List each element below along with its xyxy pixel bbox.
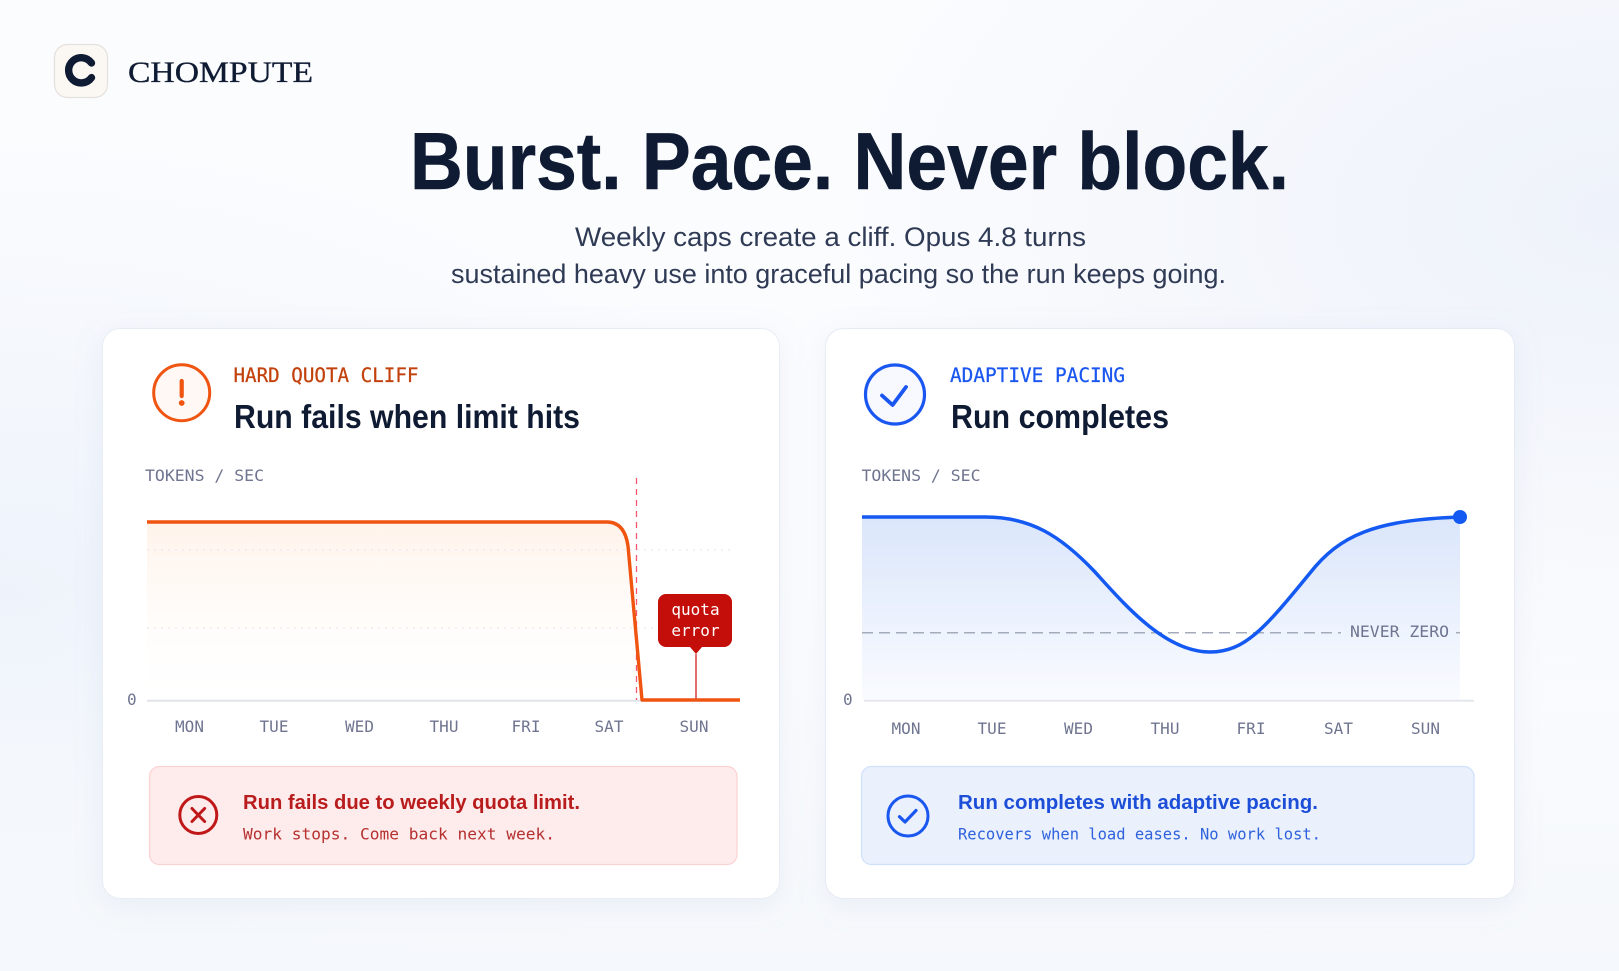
alert text: Run fails due to weekly quota limit. xyxy=(243,792,580,814)
chart: adaptive pacing xyxy=(843,466,1474,738)
chart: quota cliff: SAT xyxy=(595,717,624,736)
chart: quota cliff: 0 xyxy=(127,690,137,709)
icon: success xyxy=(888,796,928,836)
chart: adaptive pacing: WED xyxy=(1064,719,1093,738)
chart: quota cliff xyxy=(127,466,740,736)
chart: adaptive pacing: TOKENS / SEC xyxy=(862,466,980,485)
panel: adaptive pacing xyxy=(826,328,1514,898)
alert text: Run completes with adaptive pacing. xyxy=(958,792,1318,814)
chart: quota cliff: WED xyxy=(345,717,374,736)
alert: run fails xyxy=(150,766,737,864)
subtitle xyxy=(451,222,1226,289)
subtitle: sustained heavy use into graceful pacing so the run keeps going. xyxy=(451,259,1226,289)
chart: adaptive pacing: THU xyxy=(1151,719,1179,738)
chart: quota cliff: MON xyxy=(175,717,204,736)
end marker xyxy=(1453,510,1467,524)
chart: adaptive pacing: FRI xyxy=(1237,719,1265,738)
chart: adaptive pacing: 0 xyxy=(843,690,853,709)
chart: adaptive pacing: SAT xyxy=(1324,719,1353,738)
chart: quota cliff: TUE xyxy=(260,717,288,736)
subtitle: Weekly caps create a cliff. Opus 4.8 turns xyxy=(575,222,1086,252)
title: Burst. Pace. Never block. xyxy=(410,117,1289,207)
callout: quota error: error xyxy=(671,621,720,640)
brand name: CHOMPUTE xyxy=(128,56,313,89)
chart: quota cliff: SUN xyxy=(680,717,708,736)
icon: error xyxy=(180,796,217,834)
heading: Run completes xyxy=(951,398,1169,435)
callout: quota error: quota xyxy=(671,600,720,619)
chart: quota cliff: TOKENS / SEC xyxy=(145,466,264,485)
panel: hard quota cliff xyxy=(102,328,780,898)
icon: C logo mark xyxy=(54,44,108,98)
icon: warning xyxy=(154,365,210,421)
chart: quota cliff: THU xyxy=(430,717,458,736)
heading: Run fails when limit hits xyxy=(234,398,580,435)
callout: quota error xyxy=(658,594,732,699)
chart: quota cliff: FRI xyxy=(512,717,540,736)
alert: run fails: Work stops. Come back next week. xyxy=(243,824,555,844)
alert: run completes xyxy=(862,766,1474,864)
icon: check xyxy=(866,365,924,424)
logo xyxy=(54,44,313,98)
never zero label: NEVER ZERO xyxy=(1350,622,1449,641)
chart: adaptive pacing: TUE xyxy=(978,719,1006,738)
eyebrow: HARD QUOTA CLIFF xyxy=(234,364,418,387)
alert: run completes: Recovers when load eases. No work lost. xyxy=(958,826,1321,844)
chart: adaptive pacing: SUN xyxy=(1411,719,1440,738)
chart: adaptive pacing: MON xyxy=(892,719,920,738)
eyebrow: ADAPTIVE PACING xyxy=(950,364,1125,387)
